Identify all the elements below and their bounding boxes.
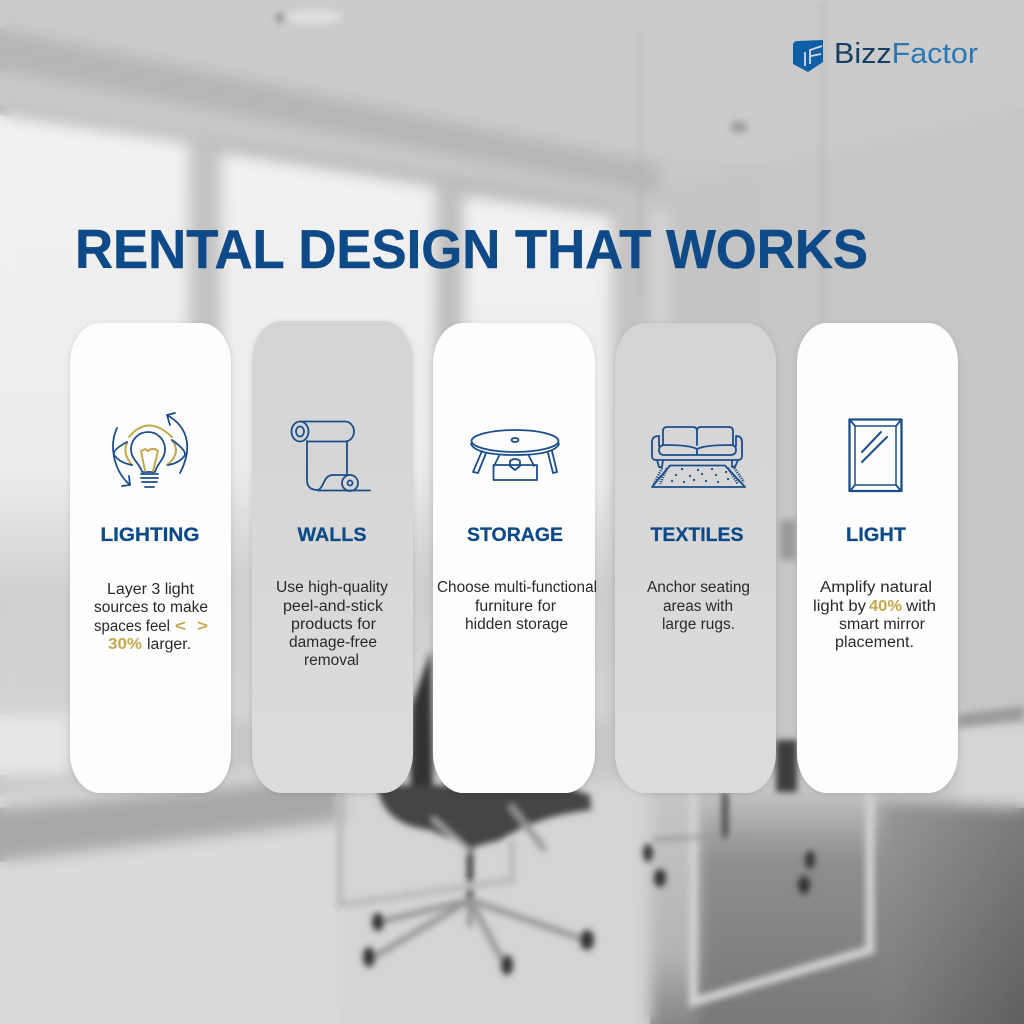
logo wordmark: BizzFactor — [834, 38, 978, 70]
title: RENTAL DESIGN THAT WORKS — [75, 218, 868, 280]
heading: lighting: LIGHTING — [100, 524, 200, 546]
text: walls description: Use high-quality — [276, 579, 388, 596]
text: lighting description: larger. — [147, 636, 191, 653]
text: walls description: products for — [291, 616, 376, 633]
text: lighting description: < — [175, 618, 186, 635]
text: textiles description — [647, 579, 750, 633]
text: lighting description: sources to make — [94, 599, 208, 616]
heading: light: LIGHT — [846, 524, 906, 546]
text: lighting description: Layer 3 light — [107, 581, 195, 598]
text: lighting description — [94, 581, 208, 653]
text: walls description: removal — [304, 652, 359, 669]
text: lighting description: 30% — [108, 636, 142, 653]
text: light description — [813, 579, 936, 651]
text: walls description: peel-and-stick — [283, 598, 383, 615]
text: light description: placement. — [835, 634, 914, 651]
text: lighting description: > — [197, 618, 208, 635]
text: light description: with — [905, 598, 936, 615]
heading: textiles: TEXTILES — [650, 524, 744, 546]
text: light description: light by — [813, 598, 866, 615]
text: light description: 40% — [869, 598, 902, 615]
logo: BizzFactor — [793, 38, 978, 72]
text: storage description: Choose multi-functional — [437, 579, 597, 596]
icon: shield logo — [793, 40, 823, 72]
heading: walls: WALLS — [298, 524, 366, 546]
text: lighting description: spaces feel — [94, 618, 170, 635]
icon: table with storage — [471, 430, 559, 480]
icon: wallpaper roll — [292, 422, 370, 491]
text: storage description: hidden storage — [465, 616, 568, 633]
text: textiles description: Anchor seating — [647, 579, 750, 596]
text: storage description: furniture for — [475, 598, 556, 615]
text: storage description — [437, 579, 597, 633]
text: walls description: damage-free — [289, 634, 377, 651]
icon: mirror — [850, 420, 902, 491]
panel: walls — [252, 321, 413, 793]
text: textiles description: large rugs. — [662, 616, 735, 633]
icon: sofa and rug — [652, 427, 745, 487]
panel: textiles — [615, 323, 776, 793]
text: light description: Amplify natural — [820, 579, 932, 596]
panel: storage — [433, 323, 597, 793]
panel: light — [797, 323, 958, 793]
panel: lighting — [70, 323, 231, 793]
text: textiles description: areas with — [663, 598, 733, 615]
heading: storage: STORAGE — [467, 524, 563, 546]
text: walls description — [276, 579, 388, 669]
icon: light bulb with arrows — [113, 413, 187, 487]
text: light description: smart mirror — [839, 616, 925, 633]
